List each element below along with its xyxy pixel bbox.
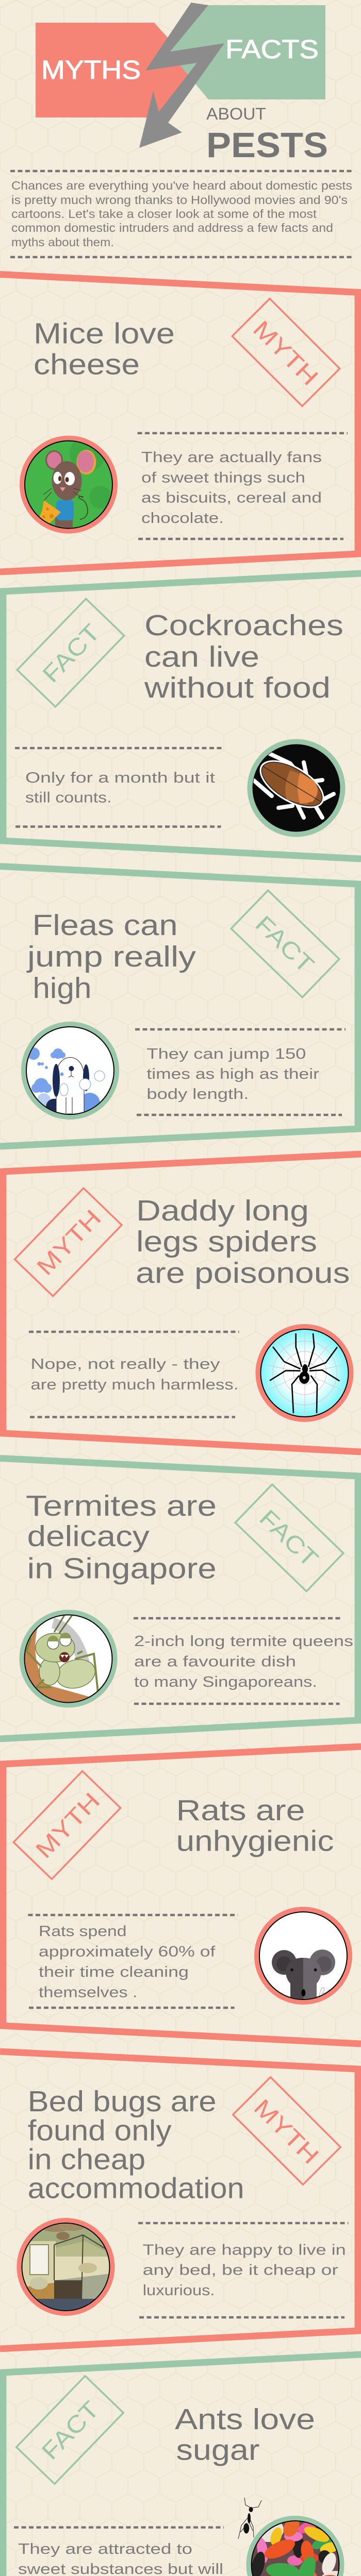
body text: chocolate.	[141, 510, 224, 527]
badge: myth	[13, 1771, 121, 1879]
heading	[34, 317, 175, 381]
badge: fact	[235, 1484, 343, 1591]
facts arrow panel	[169, 5, 325, 99]
heading: Bed bugs are	[28, 2085, 217, 2118]
heading: Ants love	[175, 2403, 315, 2436]
heading: cheese	[34, 348, 140, 381]
body text: times as high as their	[146, 1066, 319, 1082]
body text: as biscuits, cereal and	[141, 489, 322, 506]
badge: myth: MYTH	[249, 2094, 324, 2169]
lightning bolt arrow	[139, 3, 224, 148]
myths arrow panel	[36, 23, 197, 117]
badge: myth: MYTH	[30, 1787, 105, 1863]
icon: bedroom photo	[17, 2218, 114, 2316]
body text: of sweet things such	[141, 469, 305, 486]
badge: fact	[17, 599, 124, 707]
intro text: myths about them.	[11, 235, 114, 249]
heading: found only	[28, 2114, 172, 2147]
body text: They can jump 150	[146, 1046, 306, 1062]
heading: sugar	[176, 2434, 260, 2467]
panel: daddy long legs (myth)	[3, 1154, 361, 1452]
heading: in Singapore	[27, 1552, 217, 1585]
badge: fact: FACT	[36, 2396, 104, 2465]
panel: fleas (fact)	[0, 867, 358, 1146]
heading	[175, 2403, 315, 2467]
body text: still counts.	[25, 789, 111, 806]
heading: pests: PESTS	[206, 125, 328, 165]
icon: ant	[238, 2498, 261, 2539]
body text: are pretty much harmless.	[30, 1377, 238, 1393]
heading: can live	[144, 640, 259, 673]
heading: Cockroaches	[144, 609, 343, 642]
heading: Daddy long	[136, 1194, 309, 1227]
body text	[146, 1046, 319, 1103]
body text: They are happy to live in	[143, 2242, 346, 2258]
badge: fact: FACT	[254, 1504, 323, 1572]
badge: myth	[15, 1188, 122, 1296]
heading	[28, 2085, 244, 2205]
body text	[25, 770, 215, 806]
heading: Rats are	[176, 1794, 305, 1827]
body text	[143, 2242, 346, 2299]
intro text: Chances are everything you've heard about domestic pests	[11, 179, 352, 192]
icon: grey rat	[254, 1907, 352, 2005]
heading	[144, 609, 343, 704]
panel: bed bugs (myth)	[0, 2052, 358, 2349]
badge: myth: MYTH	[248, 315, 323, 391]
body text: 2-inch long termite queens	[134, 1633, 353, 1650]
body text	[39, 1923, 216, 2001]
intro text: cartoons. Let's take a closer look at some of the most	[11, 207, 317, 221]
heading	[26, 909, 196, 1005]
heading: Termites are	[26, 1489, 217, 1522]
body text: any bed, be it cheap or	[143, 2262, 338, 2278]
badge: myth: MYTH	[31, 1205, 106, 1280]
heading: Mice love	[34, 317, 175, 350]
heading	[176, 1794, 334, 1858]
body text: Rats spend	[39, 1923, 127, 1940]
icon: cockroach	[248, 739, 346, 837]
body text: body length.	[146, 1086, 249, 1103]
panel: ants (fact)	[3, 2354, 361, 2576]
heading: facts: FACTS	[225, 35, 319, 64]
panel: rats (myth)	[3, 1747, 361, 2044]
icon: termite queen	[20, 1609, 118, 1710]
panel: termites (fact)	[0, 1458, 358, 1739]
heading: accommodation	[28, 2172, 244, 2205]
intro text: is pretty much wrong thanks to Hollywood movies and 90's	[11, 193, 348, 207]
badge: myth	[232, 299, 340, 406]
badge: fact: FACT	[37, 619, 105, 688]
intro text	[11, 179, 352, 249]
icon: jelly beans	[247, 2515, 351, 2576]
icon: dog with fleas	[21, 1022, 119, 1120]
heading: myths: MYTHS	[41, 55, 141, 84]
body text: are a favourite dish	[134, 1654, 296, 1670]
title block	[36, 3, 328, 165]
heading	[26, 1489, 217, 1585]
badge: fact	[231, 890, 339, 997]
heading	[136, 1194, 350, 1290]
body text: luxurious.	[143, 2282, 215, 2299]
panel: cockroaches (fact)	[3, 573, 361, 859]
body text: to many Singaporeans.	[134, 1674, 317, 1690]
body text: their time cleaning	[39, 1964, 189, 1980]
badge: fact	[17, 2376, 123, 2484]
heading: high	[32, 972, 91, 1005]
heading: in cheap	[28, 2143, 145, 2176]
icon: mouse with cheese	[20, 435, 118, 534]
body text	[30, 1356, 238, 1393]
heading: unhygienic	[176, 1825, 334, 1858]
body text: They are actually fans	[141, 449, 322, 466]
icon: spider on web	[256, 1324, 354, 1422]
heading: are poisonous	[136, 1257, 350, 1290]
intro text: common domestic intruders and address a few facts and	[11, 221, 333, 234]
heading: without food	[144, 671, 331, 704]
body text: Only for a month but it	[25, 770, 215, 786]
badge: myth	[233, 2077, 340, 2184]
heading: delicacy	[27, 1520, 150, 1553]
body text: approximately 60% of	[39, 1943, 216, 1960]
body text	[18, 2541, 223, 2576]
heading: Fleas can	[32, 909, 177, 942]
body text	[134, 1633, 353, 1690]
body text: Nope, not really - they	[30, 1356, 220, 1372]
heading: legs spiders	[136, 1225, 317, 1258]
badge: fact: FACT	[250, 910, 319, 978]
panel: mice love cheese (myth)	[0, 274, 358, 572]
body text: themselves .	[39, 1985, 137, 2001]
body text: They are attracted to	[18, 2541, 192, 2557]
heading: about: ABOUT	[206, 105, 266, 123]
body text	[141, 449, 322, 527]
heading: jump really	[26, 940, 196, 973]
